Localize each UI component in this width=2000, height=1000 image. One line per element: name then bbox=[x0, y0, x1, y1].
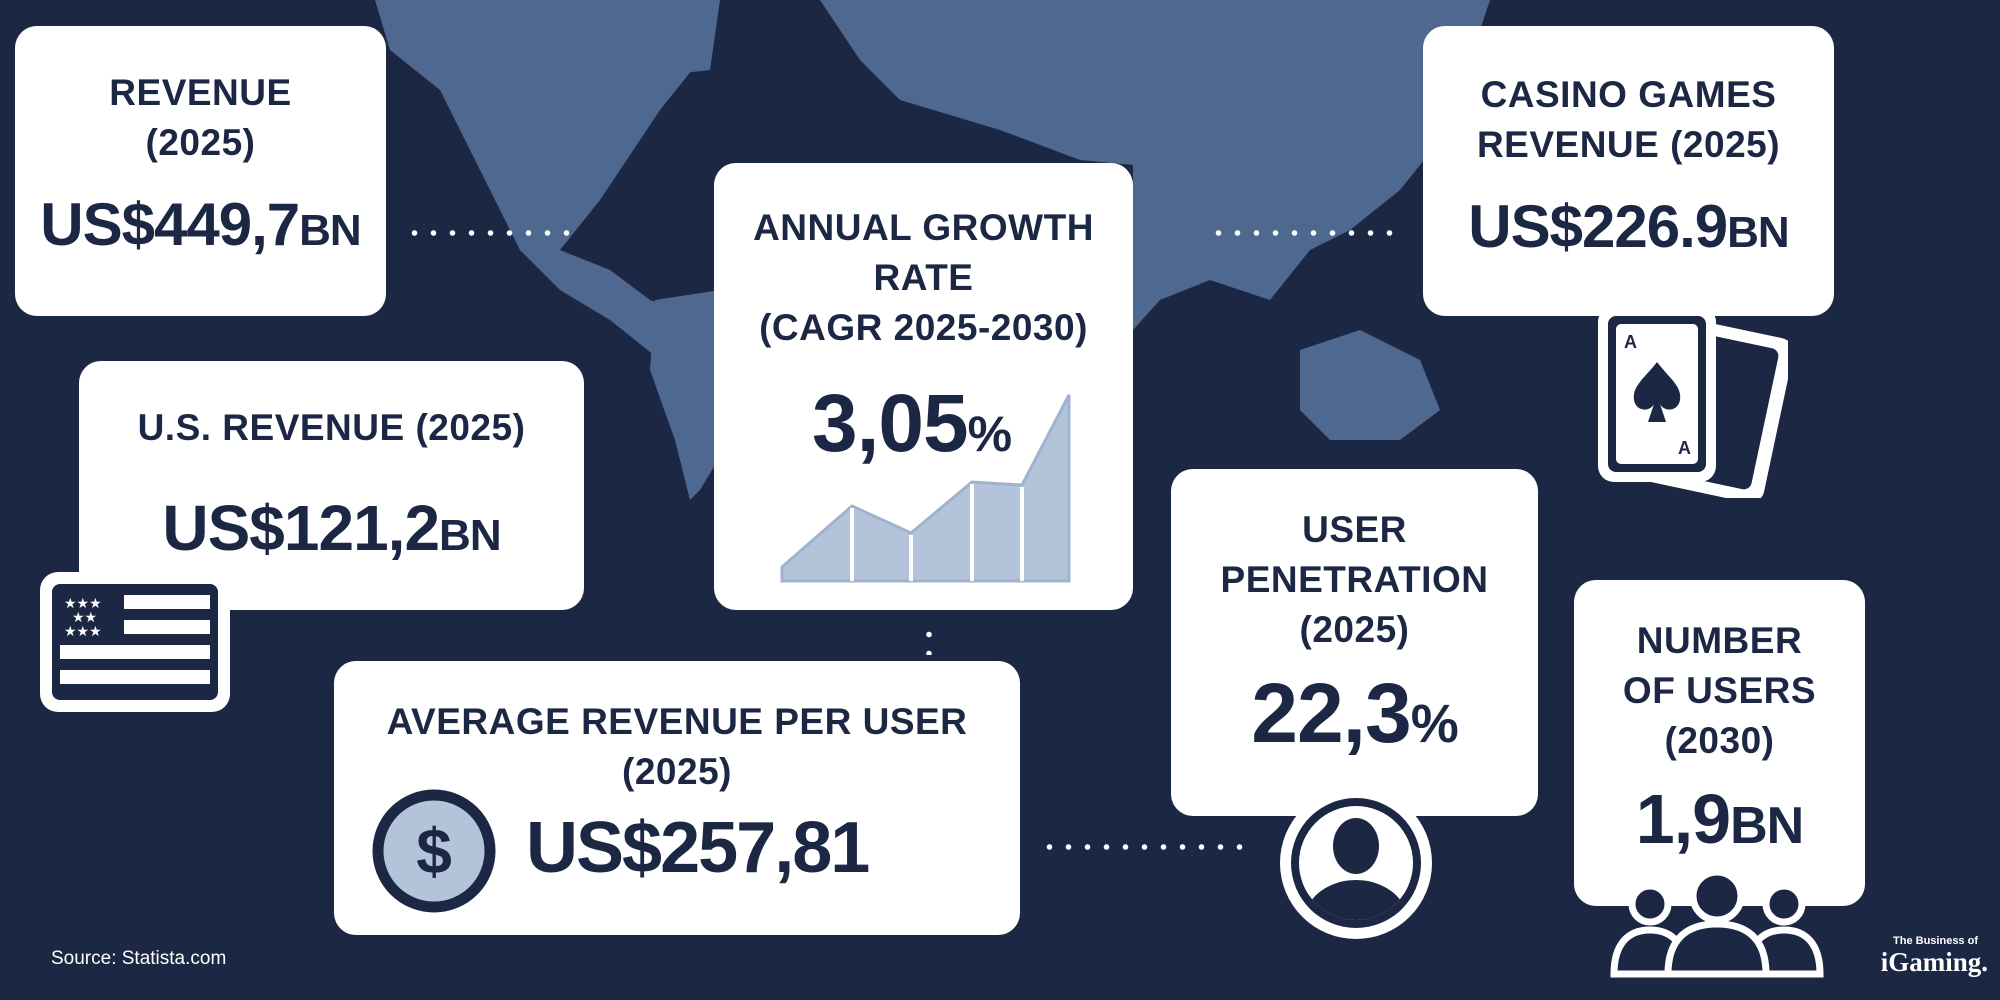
heading: revenue bbox=[109, 72, 292, 163]
value: growth: 3,05% bbox=[812, 378, 1011, 469]
panel: US revenue bbox=[79, 361, 584, 610]
value: US revenue: US$121,2BN bbox=[162, 492, 501, 564]
heading: ARPU: (2025) bbox=[622, 751, 732, 792]
heading: US revenue: U.S. REVENUE (2025) bbox=[138, 407, 525, 448]
icon: user bbox=[1280, 798, 1432, 939]
heading: growth: RATE bbox=[874, 257, 973, 298]
value: ARPU: US$257,81 bbox=[526, 808, 868, 888]
heading: casino: REVENUE (2025) bbox=[1477, 124, 1780, 165]
icon: dollar coin bbox=[372, 790, 496, 912]
heading: user penetration: USER bbox=[1302, 509, 1407, 550]
icon: US flag: ★★ bbox=[72, 610, 97, 626]
heading: growth: ANNUAL GROWTH bbox=[753, 207, 1094, 248]
icon: US flag: ★★★ bbox=[64, 596, 102, 612]
logo: The Business of bbox=[1893, 935, 1978, 947]
heading: casino bbox=[1477, 74, 1780, 165]
heading: user penetration: PENETRATION bbox=[1221, 559, 1488, 600]
icon: dollar coin: $ bbox=[416, 815, 452, 887]
heading: casino: CASINO GAMES bbox=[1481, 74, 1776, 115]
icon: playing cards bbox=[1598, 316, 1788, 498]
heading: number of users bbox=[1623, 620, 1816, 761]
icon: US flag bbox=[40, 572, 230, 712]
heading: revenue: REVENUE bbox=[109, 72, 292, 113]
value: penetration: 22,3% bbox=[1251, 666, 1458, 760]
icon: playing cards: A bbox=[1678, 438, 1691, 458]
heading: revenue: (2025) bbox=[146, 122, 255, 163]
heading: number of users: NUMBER bbox=[1637, 620, 1802, 661]
heading: ARPU: AVERAGE REVENUE PER USER bbox=[387, 701, 967, 742]
chart: growth area bbox=[780, 394, 1070, 582]
heading: user penetration: (2025) bbox=[1300, 609, 1409, 650]
value: revenue: US$449,7BN bbox=[40, 191, 361, 258]
panel: revenue bbox=[15, 26, 386, 316]
panel: annual growth rate bbox=[714, 163, 1133, 610]
panel: user penetration bbox=[1171, 469, 1538, 816]
logo: iGaming. bbox=[1881, 947, 1988, 977]
heading: number of users: (2030) bbox=[1665, 720, 1774, 761]
panel: number of users bbox=[1574, 580, 1865, 906]
source text: Source: Statista.com bbox=[51, 948, 226, 969]
value: casino: US$226.9BN bbox=[1468, 193, 1789, 260]
panel: average revenue per user bbox=[334, 661, 1020, 935]
heading: growth bbox=[753, 207, 1094, 348]
heading: number of users: OF USERS bbox=[1623, 670, 1816, 711]
heading: ARPU bbox=[387, 701, 967, 792]
heading: user penetration bbox=[1221, 509, 1488, 650]
panel: casino games revenue bbox=[1423, 26, 1834, 316]
dotted connectors bbox=[412, 230, 1392, 850]
icon: playing cards: A bbox=[1624, 332, 1637, 352]
icon: group of people bbox=[1610, 876, 1824, 978]
heading: growth: (CAGR 2025-2030) bbox=[759, 307, 1088, 348]
value: users: 1,9BN bbox=[1636, 780, 1803, 858]
icon: US flag: ★★★ bbox=[64, 624, 102, 640]
